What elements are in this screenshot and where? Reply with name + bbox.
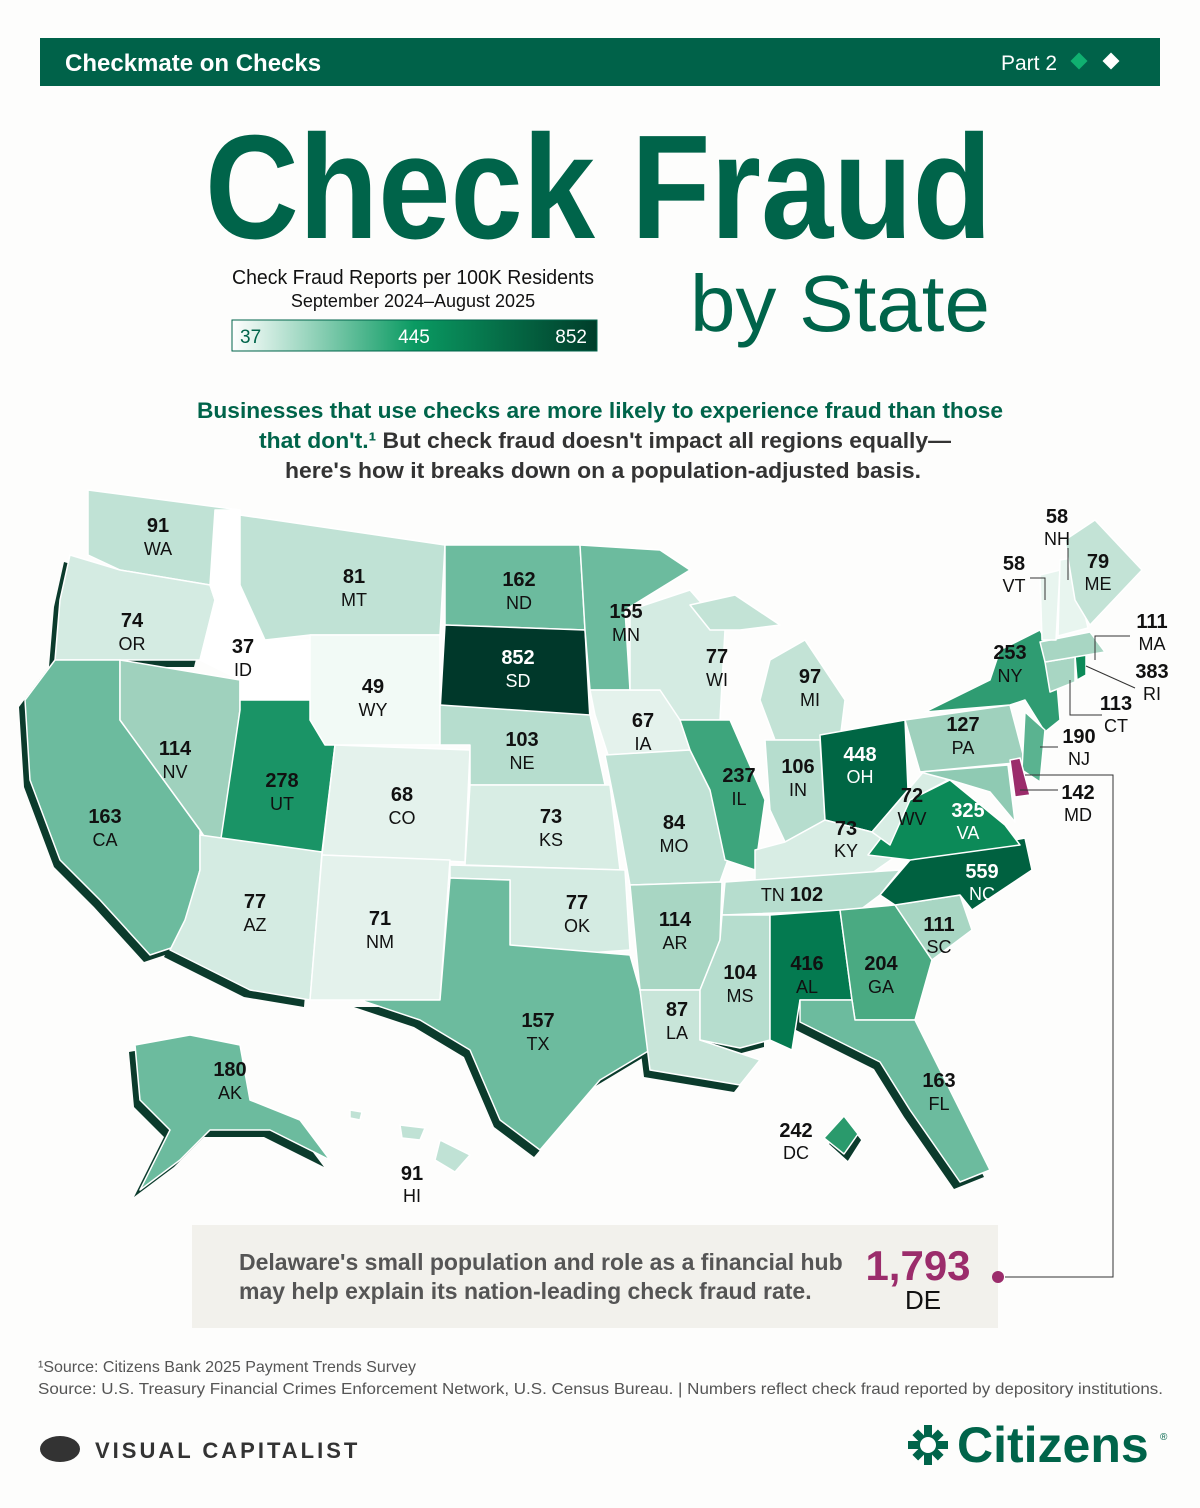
- state RI: [1075, 655, 1086, 680]
- state MO: [605, 750, 735, 885]
- state AL: [770, 910, 852, 1050]
- state CA: [25, 660, 200, 955]
- state labels: 852: [501, 647, 535, 669]
- logo: Citizens: Citizens: [957, 1417, 1149, 1473]
- state NJ: [1022, 712, 1045, 782]
- intro text: here's how it breaks down on a population-adjusted basis.: [285, 458, 921, 483]
- state labels: OH: [846, 767, 874, 787]
- intro text: [197, 398, 1003, 483]
- state GA: [840, 905, 932, 1020]
- legend: 445: [398, 327, 430, 348]
- state MI: [690, 595, 845, 740]
- state SC: [895, 895, 972, 960]
- state labels: WV: [898, 809, 926, 829]
- state OK: [450, 865, 630, 955]
- intro text: that don't.¹ But check fraud doesn't impact all regions equally—: [259, 428, 952, 453]
- state labels: 104: [723, 962, 758, 984]
- sources: Source: U.S. Treasury Financial Crimes Enforcement Network, U.S. Census Bureau. | Numbers reflect check fraud reported by depository institutions.: [38, 1381, 1163, 1398]
- state labels: NV: [162, 762, 188, 782]
- state WI: [630, 590, 725, 720]
- state labels: LA: [666, 1023, 688, 1043]
- state NV: [120, 660, 240, 860]
- state labels: 155: [609, 601, 643, 623]
- state labels: 111: [923, 914, 955, 936]
- state ME: [1065, 520, 1142, 625]
- state labels: WI: [706, 670, 728, 690]
- callout: Delaware: DE: [905, 1285, 941, 1315]
- state labels: MN: [612, 625, 640, 645]
- state labels: MT: [341, 590, 367, 610]
- logo: Visual Capitalist: VISUAL CAPITALIST: [95, 1438, 360, 1463]
- state labels: ND: [506, 593, 532, 613]
- state labels: 68: [391, 784, 413, 806]
- state labels: IL: [731, 789, 747, 809]
- state MN: [580, 545, 690, 690]
- state labels: GA: [868, 977, 894, 997]
- state KY: [755, 820, 905, 882]
- state DE: [1010, 758, 1030, 797]
- state labels: AZ: [243, 915, 267, 935]
- state MA: [1040, 632, 1105, 662]
- header bar: Part 2: [1001, 52, 1057, 75]
- state labels: AL: [796, 977, 818, 997]
- state labels: 325: [951, 800, 985, 822]
- header bar: Checkmate on Checks: [65, 50, 321, 77]
- state MD: [920, 765, 1015, 822]
- state labels: 204: [864, 953, 899, 975]
- callout: Delaware: [192, 1225, 1004, 1328]
- state TN: [722, 870, 900, 915]
- state labels: ID: [234, 660, 252, 680]
- state WA: [88, 490, 240, 585]
- state ID: [200, 510, 310, 700]
- state labels: ME: [1084, 574, 1112, 594]
- state labels: NH: [1044, 529, 1070, 549]
- state labels: 416: [790, 953, 824, 975]
- state labels: SD: [505, 671, 531, 691]
- state labels: WA: [144, 539, 172, 559]
- state labels: 127: [946, 714, 980, 736]
- state labels: RI: [1143, 684, 1161, 704]
- state labels: NJ: [1068, 749, 1090, 769]
- state labels: 163: [922, 1070, 956, 1092]
- state labels: NY: [997, 666, 1023, 686]
- state FL: [800, 1000, 990, 1182]
- state labels: KY: [834, 841, 858, 861]
- state labels: KS: [539, 830, 563, 850]
- state labels: CT: [1104, 716, 1128, 736]
- legend: 37: [240, 327, 261, 348]
- state labels: HI: [403, 1186, 421, 1206]
- state NE: [440, 705, 605, 785]
- state labels: 79: [1087, 551, 1109, 573]
- state labels: DC: [783, 1143, 809, 1163]
- state OH: [820, 720, 908, 832]
- state labels: 72: [901, 785, 923, 807]
- state NH: [1058, 558, 1088, 636]
- state WV: [872, 770, 948, 845]
- logo: Citizens: ®: [1160, 1432, 1168, 1443]
- state PA: [905, 705, 1025, 772]
- state labels: 559: [965, 861, 999, 883]
- state VT: [1040, 570, 1060, 640]
- state labels: 84: [663, 812, 686, 834]
- header bar: [40, 38, 1160, 86]
- state labels: 73: [540, 806, 562, 828]
- state labels: 87: [666, 999, 688, 1021]
- state labels: VA: [957, 823, 979, 843]
- state labels: MO: [660, 836, 688, 856]
- state labels: 114: [659, 909, 692, 931]
- state UT: [220, 700, 335, 852]
- legend: 852: [555, 327, 587, 348]
- callout: Delaware: may help explain its nation-leading check fraud rate.: [239, 1278, 812, 1304]
- state VA: [868, 780, 1020, 860]
- legend: Check Fraud Reports per 100K Residents: [232, 267, 594, 289]
- state IL: [680, 720, 765, 870]
- state OR: [55, 555, 215, 660]
- title: by State: [690, 259, 990, 348]
- callout: Delaware: Delaware's small population and role as a financial hub: [239, 1249, 843, 1275]
- state labels: 190: [1062, 726, 1096, 748]
- state labels: MS: [726, 986, 754, 1006]
- state labels: 242: [779, 1120, 813, 1142]
- state WY: [310, 635, 440, 745]
- state labels: 81: [343, 566, 365, 588]
- state labels: 77: [566, 892, 588, 914]
- state labels: CO: [388, 808, 416, 828]
- state labels: [88, 506, 1169, 1206]
- state labels: 97: [799, 666, 821, 688]
- leader lines: [1005, 548, 1135, 1277]
- state NC: [880, 838, 1032, 910]
- map shadow: [19, 562, 984, 1197]
- state labels: MI: [800, 690, 820, 710]
- state labels: IA: [634, 734, 652, 754]
- state labels: OR: [118, 634, 146, 654]
- state labels: 162: [502, 569, 536, 591]
- legend: [232, 267, 597, 351]
- state labels: NC: [969, 884, 995, 904]
- sources: ¹Source: Citizens Bank 2025 Payment Trends Survey: [38, 1359, 416, 1376]
- callout: Delaware: 1,793: [865, 1242, 971, 1289]
- state labels: OK: [564, 916, 590, 936]
- state AZ: [170, 835, 322, 1000]
- state IN: [765, 740, 825, 842]
- state MT: [240, 515, 445, 640]
- state labels: 253: [993, 642, 1027, 664]
- state labels: 237: [722, 765, 756, 787]
- sources: [38, 1359, 1163, 1398]
- state labels: 163: [88, 806, 122, 828]
- state labels: SC: [926, 937, 952, 957]
- state labels: 37: [232, 636, 254, 658]
- state AK: [135, 1035, 330, 1190]
- state labels: 74: [121, 610, 144, 632]
- state labels: AK: [218, 1083, 242, 1103]
- state labels: 71: [369, 908, 391, 930]
- state NM: [310, 855, 450, 1000]
- state KS: [465, 785, 620, 870]
- state labels: IN: [789, 780, 807, 800]
- intro text: Businesses that use checks are more likely to experience fraud than those: [197, 398, 1003, 423]
- state labels: 49: [362, 676, 384, 698]
- state labels: TN 102: [761, 884, 823, 906]
- state labels: 77: [706, 646, 728, 668]
- state labels: AR: [662, 933, 688, 953]
- state labels: 91: [147, 515, 169, 537]
- state labels: 142: [1061, 782, 1095, 804]
- state labels: CA: [92, 830, 118, 850]
- state labels: 180: [213, 1059, 247, 1081]
- state labels: 73: [835, 818, 857, 840]
- state HI: [350, 1110, 470, 1172]
- state AR: [630, 882, 722, 990]
- state DC: [824, 1116, 862, 1162]
- state labels: 383: [1135, 661, 1169, 683]
- state NY: [925, 630, 1060, 732]
- state labels: 448: [843, 744, 877, 766]
- state labels: 58: [1046, 506, 1068, 528]
- state labels: TX: [526, 1034, 550, 1054]
- state labels: 113: [1100, 693, 1132, 715]
- state labels: NE: [509, 753, 535, 773]
- state labels: MD: [1064, 805, 1092, 825]
- state ND: [445, 545, 585, 630]
- state TX: [360, 878, 650, 1150]
- state labels: PA: [952, 738, 974, 758]
- state LA: [640, 990, 760, 1085]
- state labels: MA: [1138, 634, 1166, 654]
- title: [205, 105, 992, 348]
- state labels: VT: [1002, 576, 1026, 596]
- state labels: FL: [928, 1094, 950, 1114]
- state SD: [440, 625, 590, 720]
- title: Check Fraud: [205, 105, 992, 270]
- state CO: [322, 745, 470, 862]
- state labels: 114: [159, 738, 192, 760]
- state labels: NM: [366, 932, 394, 952]
- state labels: 67: [632, 710, 654, 732]
- state labels: 103: [505, 729, 539, 751]
- state labels: UT: [270, 794, 294, 814]
- state labels: 278: [265, 770, 299, 792]
- state labels: 58: [1003, 553, 1025, 575]
- state labels: 157: [521, 1010, 555, 1032]
- state labels: WY: [358, 700, 388, 720]
- state labels: 106: [781, 756, 815, 778]
- state CT: [1045, 657, 1075, 692]
- state labels: 91: [401, 1163, 423, 1185]
- legend: September 2024–August 2025: [291, 291, 535, 311]
- map: [19, 490, 1142, 1197]
- state MS: [700, 915, 770, 1048]
- state labels: 111: [1136, 611, 1168, 633]
- state labels: 77: [244, 891, 266, 913]
- state IA: [590, 690, 690, 755]
